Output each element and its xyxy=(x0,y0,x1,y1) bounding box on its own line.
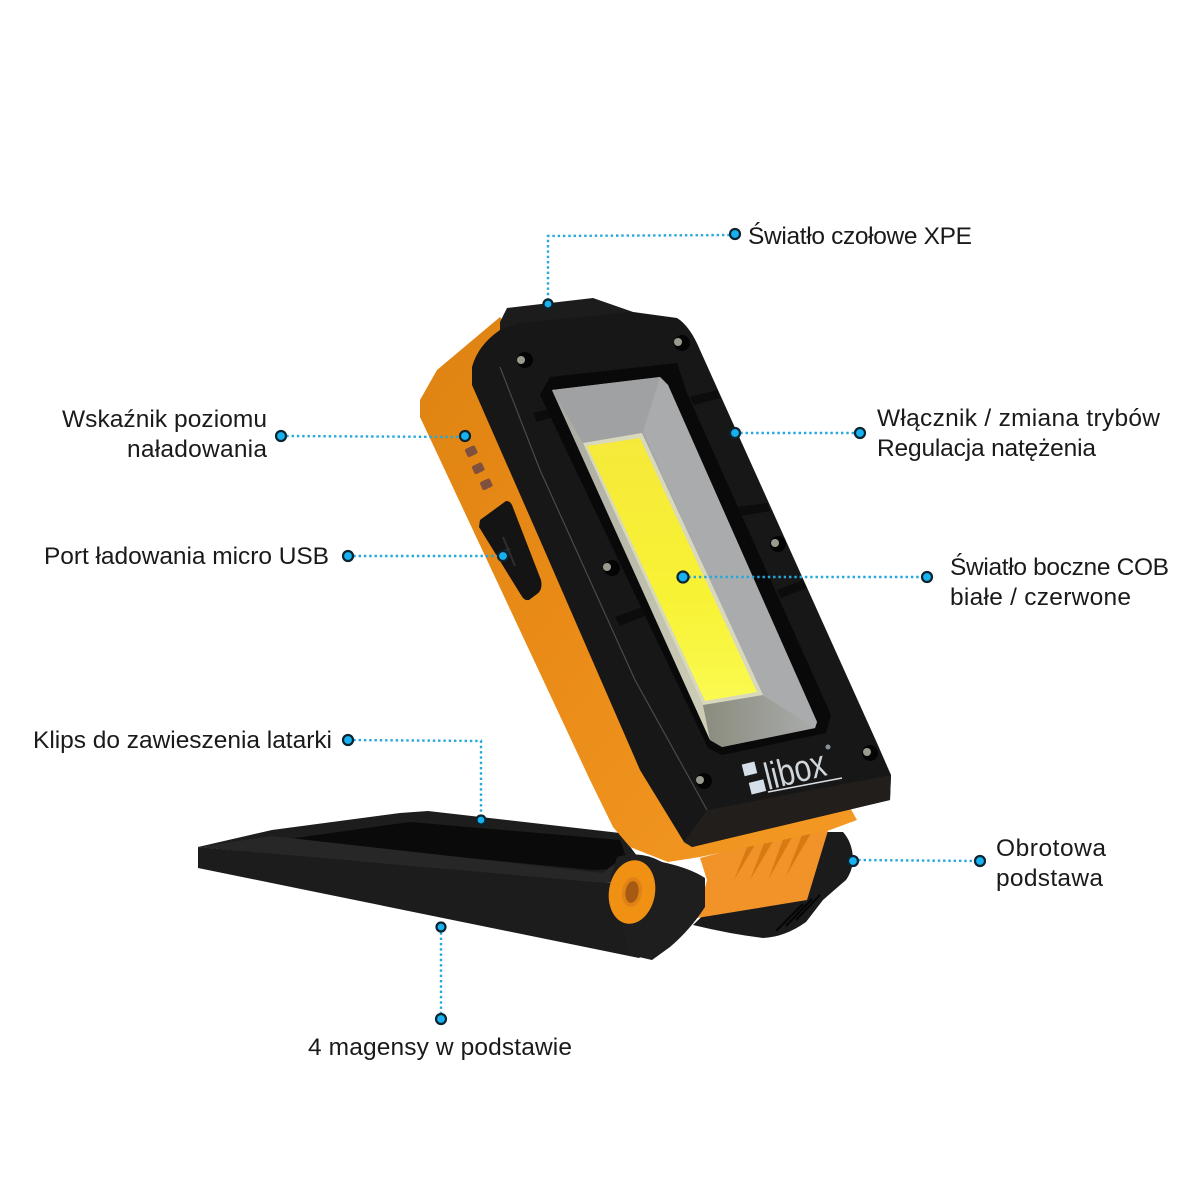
orange ribbed hinge xyxy=(697,824,830,918)
callout: Światło boczne COB xyxy=(678,553,1169,611)
callout: Obrotowa podstawa: Obrotowa xyxy=(996,835,1106,862)
callout: Klips do zawieszenia latarki: Klips do zawieszenia latarki xyxy=(33,727,332,754)
base arm xyxy=(198,811,694,958)
micro USB port cover xyxy=(479,501,542,600)
screws xyxy=(517,335,878,789)
top cap xyxy=(500,298,636,345)
front hinge cylinder with orange cap xyxy=(604,854,705,960)
libox logo: libox xyxy=(760,743,830,799)
charge indicator LEDs xyxy=(459,429,493,491)
rib grooves on rear cylinder xyxy=(776,895,820,931)
callout: Światło boczne COB: Światło boczne COB xyxy=(950,553,1169,581)
black front plate xyxy=(472,312,891,847)
callout: Światło czołowe XPE xyxy=(544,222,972,308)
orange body side xyxy=(420,317,857,862)
callout: Włącznik / zmiana trybów xyxy=(730,405,1160,462)
yellow COB LED panel xyxy=(583,433,763,705)
callout: Światło boczne COB: białe / czerwone xyxy=(950,584,1131,611)
rear rail xyxy=(198,811,640,880)
callout: Port ładowania micro USB: Port ładowania micro USB xyxy=(44,543,329,570)
dark raised panels on plate xyxy=(533,390,807,626)
plate lower bevel xyxy=(684,775,891,847)
callout: Wskaźnik poziomu naładowania: naładowania xyxy=(127,436,267,463)
callout: Obrotowa podstawa xyxy=(848,835,1106,892)
plate bevel line xyxy=(500,367,707,810)
callout: Port ładowania micro USB xyxy=(44,543,508,570)
callout: Wskaźnik poziomu naładowania xyxy=(62,406,470,463)
callout: Włącznik / zmiana trybów: Włącznik / zmiana trybów xyxy=(877,405,1160,432)
rear hinge cylinder xyxy=(693,832,853,938)
recessed frame around reflector xyxy=(540,363,831,755)
callout: 4 magensy w podstawie xyxy=(308,922,572,1061)
front face xyxy=(198,847,690,958)
callout: 4 magensy w podstawie: 4 magensy w podstawie xyxy=(308,1034,572,1061)
callout: Światło czołowe XPE: Światło czołowe XPE xyxy=(748,222,972,250)
grey reflector xyxy=(552,377,817,747)
flashlight product illustration xyxy=(198,298,891,960)
inner opening xyxy=(281,822,630,870)
callout: Włącznik / zmiana trybów: Regulacja natężenia xyxy=(877,435,1096,462)
front top strip xyxy=(198,836,640,884)
callout: Klips do zawieszenia latarki xyxy=(33,727,486,824)
callout: Obrotowa podstawa: podstawa xyxy=(996,865,1103,892)
callout: Wskaźnik poziomu naładowania: Wskaźnik poziomu xyxy=(62,406,267,433)
